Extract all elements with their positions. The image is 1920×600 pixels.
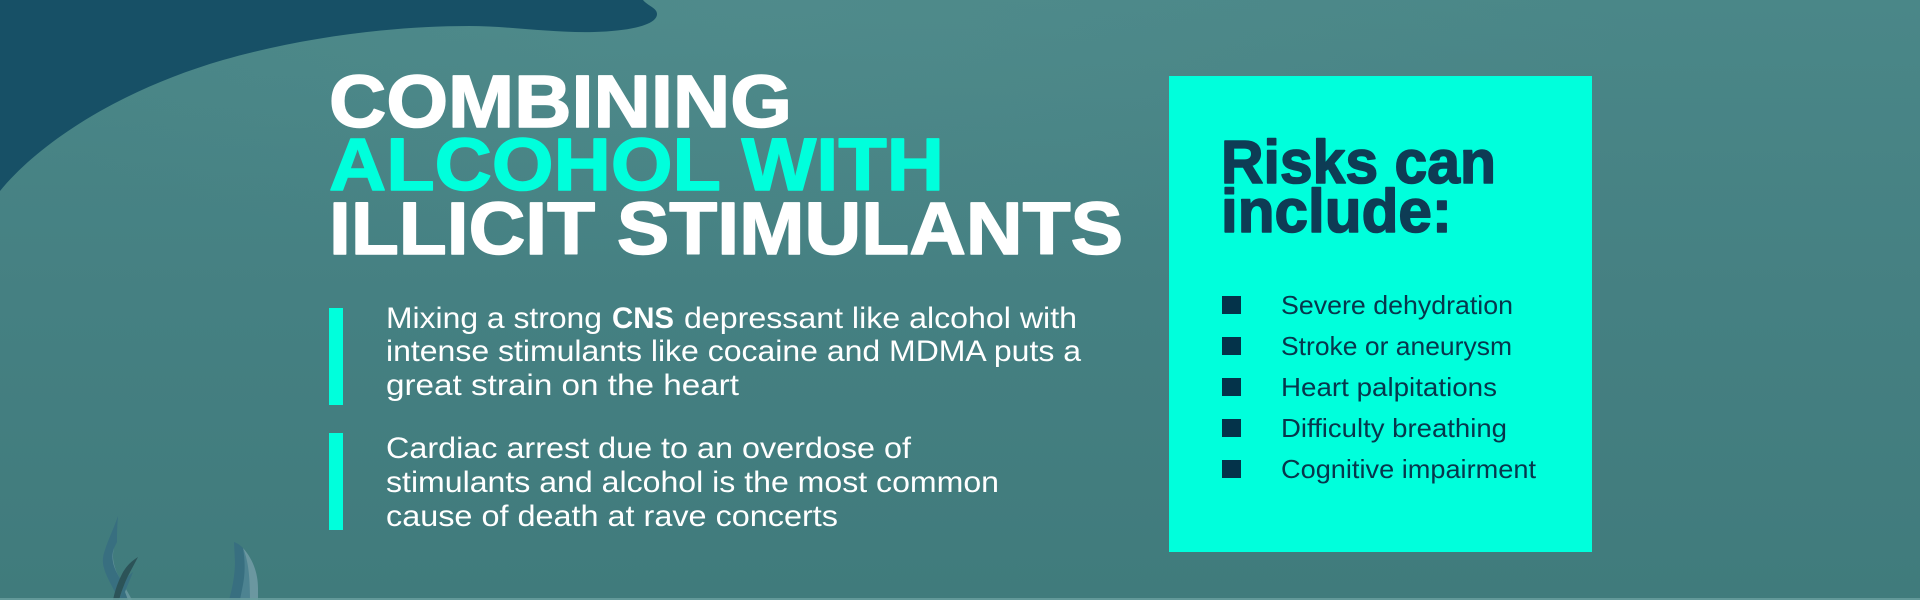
seaweed: centre dark blade — [113, 557, 138, 600]
panel background — [1169, 76, 1592, 552]
paragraph 1: depressant like alcohol with — [684, 302, 1077, 335]
seaweed: right mid blade — [238, 548, 250, 600]
paragraph 2 — [386, 432, 999, 533]
seaweed: centre blue leaf — [119, 572, 133, 600]
seaweed: left blue blade — [103, 516, 122, 592]
dark wave shape top left — [0, 0, 657, 191]
paragraph 1 — [386, 302, 1082, 402]
item: stroke or aneurysm: Stroke or aneurysm — [1281, 331, 1512, 361]
item: severe dehydration: Severe dehydration — [1281, 290, 1513, 320]
seaweed: left pale blade — [110, 548, 132, 600]
title line 2: ALCOHOL WITH — [329, 123, 944, 206]
panel: risks — [1169, 76, 1592, 552]
paragraph 1: intense stimulants like cocaine and MDMA puts a — [386, 335, 1082, 368]
paragraph 1: Mixing a strong — [386, 302, 602, 335]
item: heart palpitations: Heart palpitations — [1281, 372, 1497, 402]
paragraph 1: great strain on the heart — [386, 369, 739, 402]
paragraph 1 accent bar — [329, 308, 343, 405]
panel heading: Risks can — [1221, 128, 1496, 196]
seaweed: right pale blade — [243, 548, 258, 600]
paragraph 1: CNS — [612, 302, 674, 335]
paragraph 2: cause of death at rave concerts — [386, 500, 838, 533]
seaweed decoration — [103, 516, 258, 600]
paragraph 2: stimulants and alcohol is the most common — [386, 466, 999, 499]
seaweed: right blue blade — [229, 542, 245, 600]
title — [329, 60, 1123, 270]
bottom edge stripe — [0, 598, 1920, 600]
risk list — [1222, 290, 1537, 484]
title line 3: ILLICIT STIMULANTS — [329, 187, 1123, 270]
paragraph 2: Cardiac arrest due to an overdose of — [386, 432, 912, 465]
panel heading: include: — [1221, 177, 1452, 245]
title line 1: COMBINING — [329, 60, 792, 143]
paragraph 2 accent bar — [329, 433, 343, 530]
panel heading — [1221, 128, 1496, 245]
item: cognitive impairment: Cognitive impairment — [1281, 454, 1537, 484]
item: difficulty breathing: Difficulty breathing — [1281, 413, 1507, 443]
